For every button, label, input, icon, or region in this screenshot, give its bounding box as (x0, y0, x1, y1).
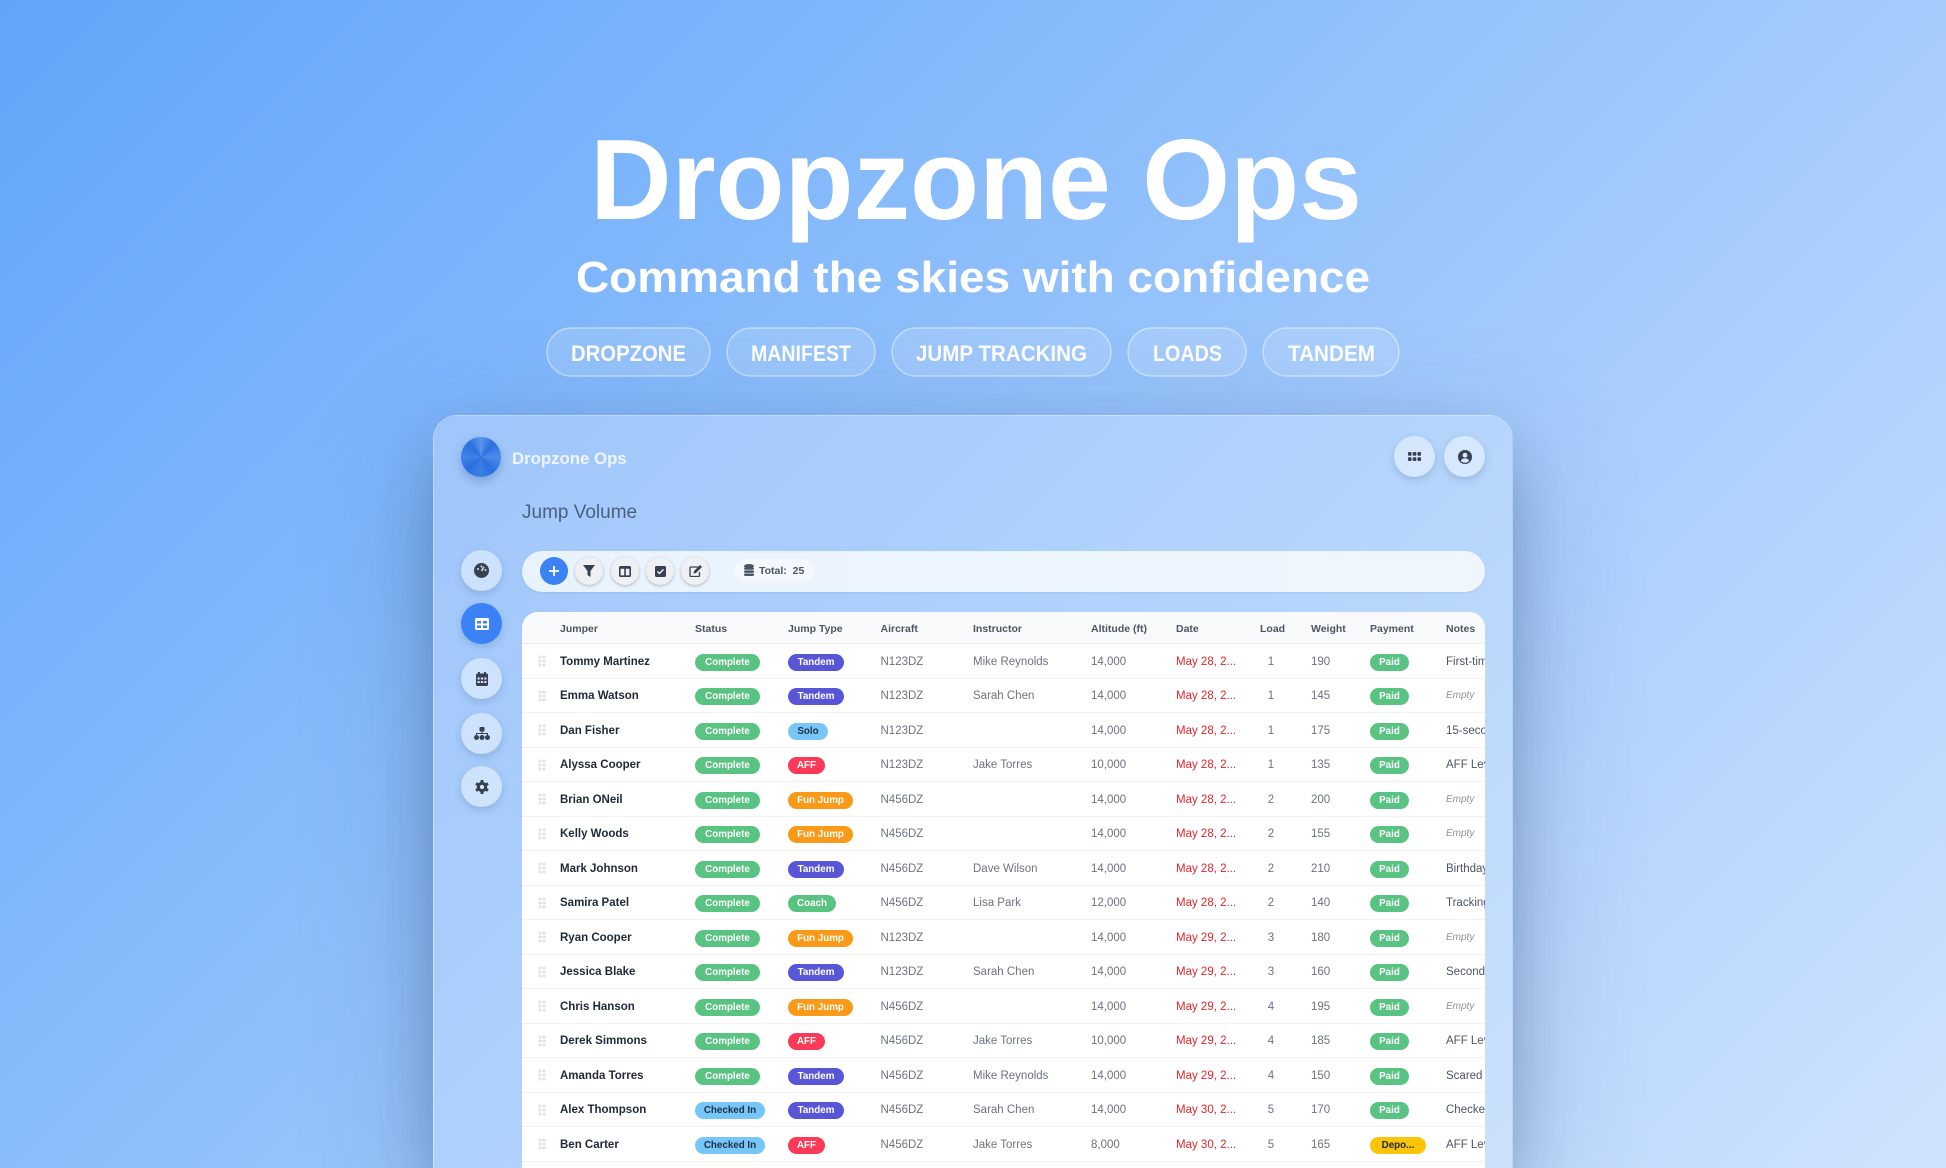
row: Alex Thompson: 5 (1268, 1104, 1274, 1116)
row: Kelly Woods: Paid (1379, 829, 1400, 840)
button: user profile (1444, 436, 1485, 477)
row: Kelly Woods (522, 816, 1485, 851)
tag: tandem (1263, 328, 1399, 376)
row: Ryan Cooper: Paid (1379, 932, 1400, 944)
table header: Payment (1370, 623, 1414, 635)
row: Ben Carter: 165 (1311, 1138, 1330, 1150)
row: Samira Patel: Paid (1379, 898, 1400, 909)
row: Kelly Woods: Complete (705, 829, 750, 840)
row: Brian ONeil: 14,000 (1091, 794, 1126, 806)
row: Derek Simmons: Jake Torres (973, 1035, 1032, 1047)
row: Amanda Torres: Tandem (798, 1070, 834, 1082)
row: Alyssa Cooper: Complete (705, 760, 750, 771)
tag: loads: LOADS (1153, 341, 1222, 366)
row: Kelly Woods: 14,000 (1091, 828, 1126, 840)
row: Ryan Cooper: Ryan Cooper (560, 932, 632, 944)
row: Tommy Martinez: Complete (705, 656, 750, 668)
row: Amanda Torres: N456DZ (880, 1070, 923, 1082)
row: Mark Johnson: N456DZ (880, 862, 923, 874)
row: Mark Johnson (522, 851, 1485, 886)
row: Jessica Blake: Complete (705, 967, 750, 978)
row: Alyssa Cooper: 135 (1311, 759, 1330, 771)
row: Jessica Blake: Sarah Chen (973, 966, 1034, 978)
table header (522, 612, 1485, 644)
row: Brian ONeil: Paid (1379, 794, 1400, 806)
row: Ben Carter (522, 1127, 1485, 1162)
row: Chris Hanson: N456DZ (880, 1000, 923, 1012)
row: Samira Patel: Lisa Park (973, 897, 1021, 909)
sidebar: settings (461, 766, 502, 807)
row: Dan Fisher: Solo (797, 726, 819, 736)
row: Amanda Torres: Complete (705, 1070, 750, 1082)
row: Alyssa Cooper: Alyssa Cooper (560, 759, 641, 771)
row: Amanda Torres: 14,000 (1091, 1070, 1126, 1082)
row: Mark Johnson: 2 (1268, 862, 1274, 874)
row: Alyssa Cooper: Paid (1379, 760, 1400, 771)
row: Mark Johnson: 210 (1311, 862, 1330, 874)
row: Samira Patel: Samira Patel (560, 897, 629, 909)
row: Ryan Cooper: Empty (1446, 932, 1474, 942)
row: Alex Thompson: Paid (1379, 1105, 1400, 1116)
row: Alex Thompson (522, 1092, 1485, 1127)
row: Kelly Woods: N456DZ (880, 828, 923, 840)
logo (461, 437, 501, 477)
row: Jessica Blake: 160 (1311, 966, 1330, 978)
row: Kelly Woods: Kelly Woods (560, 828, 629, 840)
panel: app window (433, 415, 1513, 1168)
row: Brian ONeil: 200 (1311, 794, 1330, 806)
row: Ryan Cooper: 14,000 (1091, 932, 1126, 944)
row: Chris Hanson: Fun Jump (797, 1002, 844, 1012)
row: Tommy Martinez: 1 (1268, 656, 1274, 668)
row: Brian ONeil: Complete (705, 794, 750, 806)
row: Alyssa Cooper: 10,000 (1091, 759, 1126, 771)
row: Amanda Torres: Mike Reynolds (973, 1070, 1048, 1082)
row: Alex Thompson: Alex Thompson (560, 1104, 646, 1116)
row: Mark Johnson: Complete (705, 864, 750, 874)
tag: jump tracking: JUMP TRACKING (916, 341, 1087, 366)
row: Ben Carter: AFF (797, 1140, 816, 1150)
row: Dan Fisher: 1 (1268, 724, 1274, 736)
tag: jump tracking (892, 328, 1111, 376)
row: Dan Fisher: 14,000 (1091, 724, 1126, 736)
row: Ben Carter: Depo... (1382, 1140, 1414, 1150)
row: Tommy Martinez: N123DZ (880, 656, 923, 668)
tag: loads (1128, 328, 1246, 376)
row: Derek Simmons: Derek Simmons (560, 1035, 647, 1047)
row: Samira Patel (522, 886, 1485, 920)
row: Derek Simmons: Paid (1379, 1036, 1400, 1047)
row: Kelly Woods: 155 (1311, 828, 1330, 840)
row: Ben Carter: Checked In (704, 1140, 756, 1150)
button: filter (575, 557, 603, 585)
row: Jessica Blake: Jessica Blake (560, 966, 635, 978)
table header: Aircraft (880, 623, 918, 635)
row: Mark Johnson: Paid (1379, 864, 1400, 874)
title: Dropzone Ops (590, 117, 1362, 244)
row: Emma Watson: Complete (705, 691, 750, 702)
total counter: Total: 25 (759, 565, 804, 577)
row: Brian ONeil: N456DZ (880, 794, 923, 806)
row: Jessica Blake: 14,000 (1091, 966, 1126, 978)
row: Alex Thompson: May 30, 2... (1176, 1104, 1236, 1116)
row: Ben Carter: N456DZ (880, 1138, 923, 1150)
row: Chris Hanson: May 29, 2... (1176, 1000, 1236, 1012)
row: Alyssa Cooper (522, 748, 1485, 782)
table header: Status (695, 623, 727, 635)
row: Ryan Cooper: May 29, 2... (1176, 932, 1236, 944)
row: Derek Simmons: Complete (705, 1036, 750, 1047)
row: Kelly Woods: Empty (1446, 828, 1474, 839)
row: Mark Johnson: Dave Wilson (973, 862, 1038, 874)
table header: Date (1176, 623, 1199, 635)
sidebar: table view active (461, 603, 502, 644)
row: Amanda Torres: Paid (1379, 1070, 1400, 1082)
table header: Notes (1446, 623, 1475, 635)
sidebar: dashboard (461, 550, 502, 591)
row: Amanda Torres (522, 1058, 1485, 1092)
row: Emma Watson: N123DZ (880, 690, 923, 702)
row: Chris Hanson (522, 989, 1485, 1024)
row: Emma Watson: Paid (1379, 691, 1400, 702)
row: Ryan Cooper: Complete (705, 932, 750, 944)
row: Chris Hanson: 195 (1311, 1000, 1330, 1012)
row: Ben Carter: Jake Torres (973, 1138, 1032, 1150)
row: Ben Carter: 8,000 (1091, 1138, 1120, 1150)
row: Chris Hanson: 14,000 (1091, 1000, 1126, 1012)
button: select (646, 557, 674, 585)
row: Samira Patel: May 28, 2... (1176, 897, 1236, 909)
row: Tommy Martinez: Paid (1379, 656, 1400, 668)
row: Tommy Martinez: 14,000 (1091, 656, 1126, 668)
tag: tandem: TANDEM (1288, 341, 1375, 366)
row: Alyssa Cooper: Jake Torres (973, 759, 1032, 771)
row: Jessica Blake: Second (1446, 966, 1485, 978)
row: Tommy Martinez: 190 (1311, 656, 1330, 668)
row: Ryan Cooper: N123DZ (880, 932, 923, 944)
row: Ryan Cooper: Fun Jump (797, 932, 844, 944)
total counter (734, 559, 814, 583)
row: Jessica Blake: Paid (1379, 967, 1400, 978)
row: Samira Patel: Coach (797, 898, 827, 909)
row: Dan Fisher: 175 (1311, 724, 1330, 736)
button: add (540, 557, 568, 585)
row: Kelly Woods: May 28, 2... (1176, 828, 1236, 840)
subtitle: Command the skies with confidence (576, 253, 1370, 302)
row: Brian ONeil: Empty (1446, 794, 1474, 804)
row: Emma Watson: 14,000 (1091, 690, 1126, 702)
tag: manifest: MANIFEST (751, 341, 851, 366)
row: Tommy Martinez: Mike Reynolds (973, 656, 1048, 668)
row: Brian ONeil: May 28, 2... (1176, 794, 1236, 806)
row: Derek Simmons: 10,000 (1091, 1035, 1126, 1047)
row: Ben Carter: Ben Carter (560, 1138, 619, 1150)
row: Ryan Cooper: 180 (1311, 932, 1330, 944)
table header: Jumper (560, 623, 598, 635)
row: Chris Hanson: Empty (1446, 1000, 1474, 1012)
row: Mark Johnson: Mark Johnson (560, 862, 638, 874)
row: Alex Thompson: N456DZ (880, 1104, 923, 1116)
row: Ben Carter: May 30, 2... (1176, 1138, 1236, 1150)
row: Dan Fisher: Dan Fisher (560, 724, 619, 736)
row: Emma Watson: Emma Watson (560, 690, 639, 702)
row: Samira Patel: 2 (1268, 897, 1274, 909)
row: Dan Fisher: May 28, 2... (1176, 724, 1236, 736)
row: Kelly Woods: 2 (1268, 828, 1274, 840)
row: Brian ONeil: Fun Jump (797, 794, 844, 806)
table header: Jump Type (788, 623, 843, 635)
row: Emma Watson: 145 (1311, 690, 1330, 702)
row: Alyssa Cooper: AFF (797, 760, 816, 771)
row: Alex Thompson: Tandem (798, 1105, 834, 1116)
row: Alex Thompson: Checked In (704, 1105, 756, 1116)
row: Derek Simmons: N456DZ (880, 1035, 923, 1047)
row: Chris Hanson: Paid (1379, 1002, 1400, 1012)
hero header (546, 117, 1400, 377)
row: Tommy Martinez: Tommy Martinez (560, 656, 650, 668)
row: Jessica Blake: May 29, 2... (1176, 966, 1236, 978)
row: Ben Carter: 5 (1268, 1138, 1274, 1150)
button: apps grid (1394, 436, 1435, 477)
row: Dan Fisher: Paid (1379, 726, 1400, 736)
row: Dan Fisher (522, 713, 1485, 748)
row: Amanda Torres: 4 (1268, 1070, 1274, 1082)
row: Derek Simmons: AFF (797, 1036, 816, 1047)
button: columns (611, 557, 639, 585)
data table (522, 612, 1485, 1168)
page heading: Jump Volume (522, 502, 637, 523)
row: Chris Hanson: 4 (1268, 1000, 1274, 1012)
row: Brian ONeil: Brian ONeil (560, 794, 623, 806)
button: edit (681, 557, 709, 585)
row: Ryan Cooper (522, 920, 1485, 954)
table header: Weight (1311, 623, 1346, 635)
row: Samira Patel: Complete (705, 898, 750, 909)
row: Brian ONeil (522, 782, 1485, 816)
tag: manifest (727, 328, 875, 376)
row: Tommy Martinez (522, 644, 1485, 678)
row: Samira Patel: 12,000 (1091, 897, 1126, 909)
row: Jessica Blake: Tandem (798, 967, 834, 978)
row: Emma Watson: Tandem (798, 691, 834, 702)
row: Alex Thompson: Sarah Chen (973, 1104, 1034, 1116)
row: Alex Thompson: 14,000 (1091, 1104, 1126, 1116)
row: Mark Johnson: Tandem (798, 864, 834, 874)
table header: Load (1260, 623, 1285, 635)
row: Emma Watson: Sarah Chen (973, 690, 1034, 702)
sidebar: org hierarchy (461, 713, 502, 754)
row: Brian ONeil: 2 (1268, 794, 1274, 806)
row: Dan Fisher: Complete (705, 726, 750, 736)
sidebar: calendar (461, 658, 502, 699)
row: Emma Watson: Empty (1446, 690, 1474, 701)
row: Kelly Woods: Fun Jump (797, 829, 844, 840)
row: Ryan Cooper: 3 (1268, 932, 1274, 944)
row: Jessica Blake: 3 (1268, 966, 1274, 978)
row: Emma Watson (522, 678, 1485, 713)
row: Jessica Blake: N123DZ (880, 966, 923, 978)
row: Amanda Torres: Amanda Torres (560, 1070, 644, 1082)
tag: dropzone (547, 328, 710, 376)
row: Mark Johnson: 14,000 (1091, 862, 1126, 874)
row: Emma Watson: May 28, 2... (1176, 690, 1236, 702)
row: Tommy Martinez: May 28, 2... (1176, 656, 1236, 668)
row: Dan Fisher: N123DZ (880, 724, 923, 736)
row: Amanda Torres: 150 (1311, 1070, 1330, 1082)
row: Alex Thompson: 170 (1311, 1104, 1330, 1116)
row: Derek Simmons: May 29, 2... (1176, 1035, 1236, 1047)
row: Samira Patel: 140 (1311, 897, 1330, 909)
table header: Altitude (ft) (1091, 623, 1147, 635)
row: Alyssa Cooper: N123DZ (880, 759, 923, 771)
row: Alyssa Cooper: May 28, 2... (1176, 759, 1236, 771)
row: Emma Watson: 1 (1268, 690, 1274, 702)
row: Tommy Martinez: Tandem (798, 656, 834, 668)
row: Chris Hanson: Chris Hanson (560, 1000, 635, 1012)
brand name: Dropzone Ops (512, 449, 627, 468)
row: Derek Simmons (522, 1024, 1485, 1058)
row: Mark Johnson: May 28, 2... (1176, 862, 1236, 874)
row: Derek Simmons: 4 (1268, 1035, 1274, 1047)
row: Jessica Blake (522, 954, 1485, 989)
row: Derek Simmons: 185 (1311, 1035, 1330, 1047)
tag: dropzone: DROPZONE (571, 341, 686, 366)
row: Amanda Torres: May 29, 2... (1176, 1070, 1236, 1082)
row: Samira Patel: N456DZ (880, 897, 923, 909)
table header: Instructor (973, 623, 1022, 635)
row: Alyssa Cooper: 1 (1268, 759, 1274, 771)
toolbar (522, 551, 1485, 592)
row: Chris Hanson: Complete (705, 1002, 750, 1012)
